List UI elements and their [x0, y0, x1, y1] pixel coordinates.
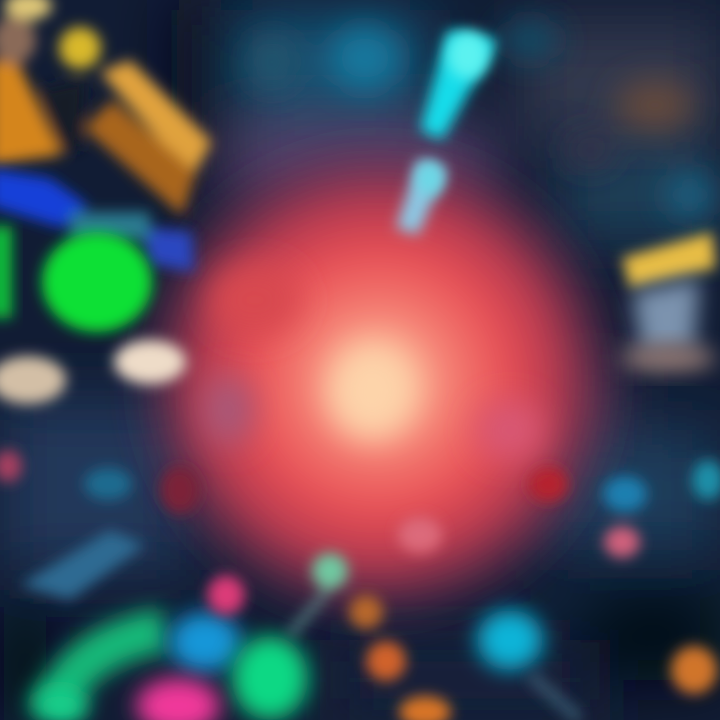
orange blocks, upper left	[0, 0, 212, 216]
green blocks, left	[0, 226, 152, 332]
yellow cup, right	[620, 232, 716, 372]
central red burst	[128, 132, 628, 632]
top blue smudges	[248, 20, 714, 217]
small dots, right and left	[0, 450, 720, 600]
cream ovals, left	[0, 340, 186, 404]
ring chart, lower left	[32, 612, 308, 720]
orange dot, lower right corner	[671, 646, 717, 694]
connected dots, lower centre	[207, 553, 451, 720]
cyan dot, lower right	[477, 610, 580, 720]
cyan light beam	[396, 30, 498, 235]
blue band, left	[0, 168, 194, 272]
